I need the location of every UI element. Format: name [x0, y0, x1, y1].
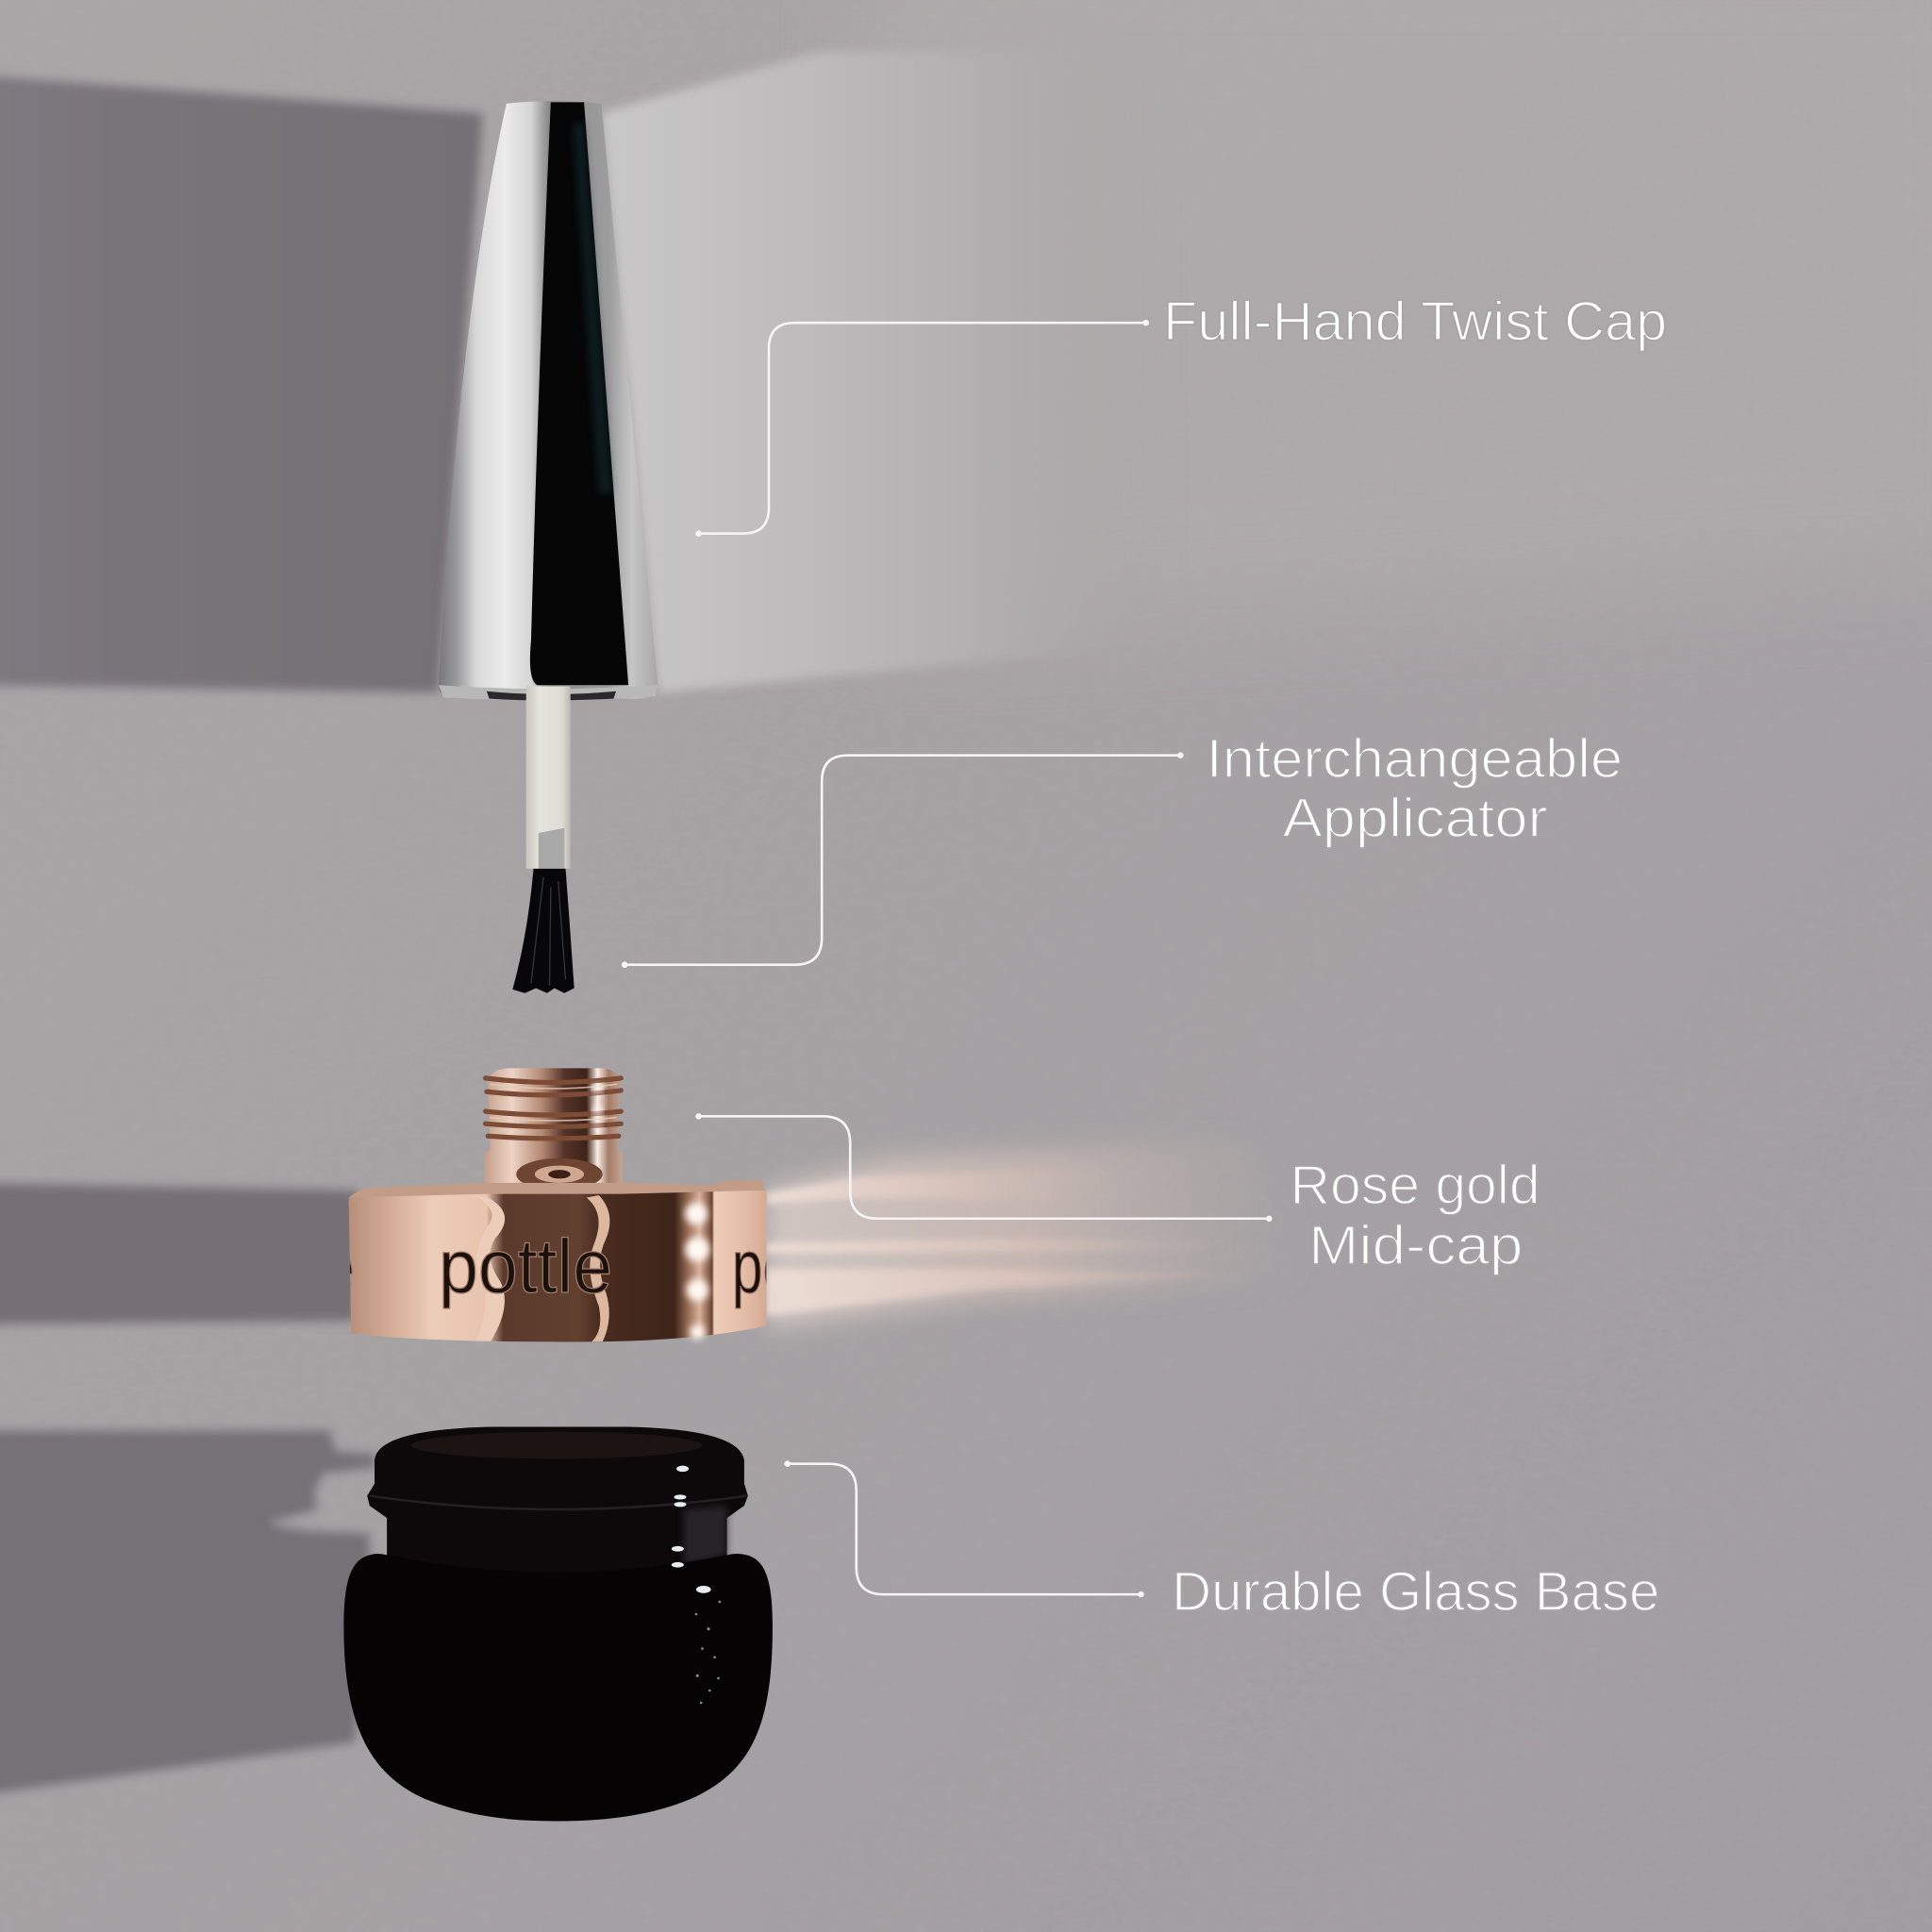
light wedge beside cap — [601, 52, 1183, 692]
mid-cap threads — [486, 1078, 621, 1139]
label: rose gold mid-cap — [1291, 1155, 1541, 1276]
jar opening — [411, 1432, 702, 1458]
mid-cap collar reflection — [516, 1158, 603, 1191]
jar sparkles — [695, 1601, 721, 1704]
label: full-hand twist cap: Full-Hand Twist Cap — [1163, 291, 1667, 352]
jar neck — [367, 1426, 748, 1583]
callout: rose gold mid-cap — [695, 1113, 1273, 1222]
jar neck sheen — [684, 1506, 727, 1565]
cap base rim — [439, 685, 658, 700]
mid-cap wavy reflections — [349, 1195, 766, 1341]
label: interchangeable applicator — [1207, 728, 1623, 849]
shadow: cap — [0, 74, 483, 692]
cap dark reflection — [530, 102, 628, 685]
jar thread — [370, 1496, 747, 1509]
cap rim inner — [487, 691, 616, 701]
icon: rose gold mid-cap — [349, 1068, 766, 1343]
label: rose gold mid-cap: Rose gold — [1291, 1155, 1541, 1216]
callout: interchangeable applicator — [622, 752, 1184, 968]
neck highlights — [592, 1084, 603, 1128]
shadow: mid-cap — [0, 1183, 358, 1324]
brush bristles — [512, 869, 575, 993]
mid-cap neck — [484, 1068, 623, 1201]
callout: full-hand twist cap — [695, 320, 1149, 537]
jar highlights — [672, 1466, 711, 1593]
rose gold light rays — [766, 1140, 1306, 1328]
callout: durable glass base — [784, 1460, 1144, 1597]
icon: interchangeable applicator — [512, 687, 575, 993]
mid-cap ring top — [349, 1180, 766, 1205]
mid-cap ring body — [349, 1191, 766, 1341]
label: interchangeable applicator: Interchangeable — [1207, 728, 1623, 790]
bristle strands — [531, 877, 566, 986]
shadow: jar — [0, 1430, 375, 1798]
cap blue sheen — [573, 124, 612, 492]
mid-cap highlights — [685, 1203, 709, 1340]
label: interchangeable applicator: Applicator — [1283, 788, 1547, 849]
mid-cap wavy reflections: po — [732, 1224, 793, 1309]
brush stem — [526, 687, 571, 869]
brush ferrule — [539, 828, 564, 869]
logo: pottle — [439, 1224, 612, 1309]
jar body — [343, 1554, 773, 1821]
icon: full-hand twist cap — [439, 101, 658, 701]
icon: durable glass base — [343, 1426, 773, 1821]
label: durable glass base: Durable Glass Base — [1172, 1561, 1659, 1623]
mid-cap wavy reflections: e — [313, 1224, 356, 1309]
label: rose gold mid-cap: Mid-cap — [1308, 1215, 1523, 1276]
